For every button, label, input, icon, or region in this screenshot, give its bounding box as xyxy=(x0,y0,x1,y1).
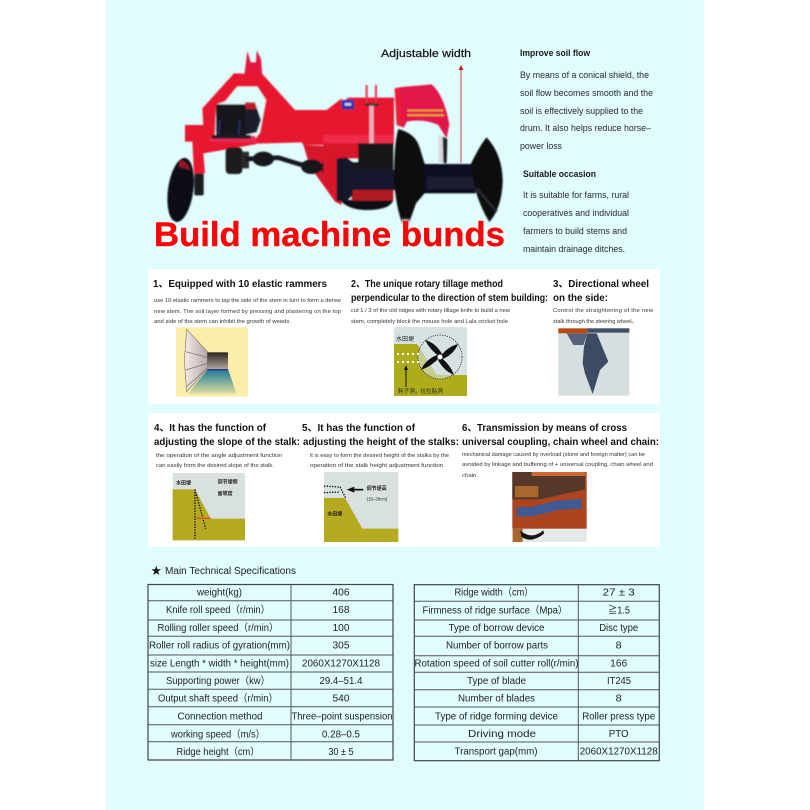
feature 4: 4、It has the function of xyxy=(154,423,267,434)
feature 5: adjusting the height of the stalks: xyxy=(303,437,459,448)
table: specifications right: Roller press type xyxy=(582,711,656,722)
table: specifications left: Connection method xyxy=(178,711,262,722)
text block: suitable occasion: Suitable occasion xyxy=(523,169,596,179)
table: specifications right xyxy=(414,585,659,761)
table: specifications right: 2060X1270X1128 xyxy=(580,747,658,758)
text block: improve soil flow: power loss xyxy=(520,141,563,151)
table: specifications left: Ridge height（cm） xyxy=(176,746,260,758)
table: specifications right: 8 xyxy=(616,641,622,652)
table: specifications right: Rotation speed of soil cutter roll(r/min) xyxy=(414,658,578,669)
scraper blade xyxy=(438,135,447,163)
feature 6: chain. xyxy=(462,473,478,479)
feature 1: use 10 elastic rammers to tap the side of the stem in turn to form a dense xyxy=(154,298,341,304)
heading: main technical specifications: Main Technical Specifications xyxy=(165,566,296,577)
table: specifications left: 30 ± 5 xyxy=(328,747,354,758)
top link xyxy=(365,85,379,163)
table: specifications right: Driving mode xyxy=(468,729,536,740)
text block: improve soil flow: Improve soil flow xyxy=(520,48,590,58)
text block: improve soil flow: drum. It also helps reduce horse– xyxy=(520,123,651,133)
table: specifications left: 305 xyxy=(332,641,350,652)
table: specifications left: Rolling roller speed（r/min） xyxy=(158,622,278,634)
feature 5 xyxy=(302,423,459,542)
feature 1: new stem. The soil layer formed by pressing and plastering on the top xyxy=(154,309,341,315)
text block: suitable occasion: maintain drainage ditches. xyxy=(523,244,625,254)
text block: improve soil flow: By means of a conical shield, the xyxy=(520,70,649,80)
table: specifications left: 540 xyxy=(332,694,350,705)
icon: height diagram xyxy=(324,472,398,542)
title: Build machine bunds: Build machine bunds xyxy=(154,216,505,254)
machine: rear section xyxy=(323,84,503,232)
hitch tower xyxy=(244,50,262,76)
table: specifications left: 406 xyxy=(332,588,350,598)
drum xyxy=(424,164,476,193)
table: specifications left: Output shaft speed（r/min） xyxy=(158,693,278,705)
table: specifications left: Knife roll speed（r/min） xyxy=(166,604,270,616)
table: specifications left: 100 xyxy=(332,623,350,634)
text block: improve soil flow xyxy=(520,48,653,151)
feature 2: perpendicular to the direction of stem building: xyxy=(351,293,548,304)
feature 4: adjusting the slope of the stalk: xyxy=(154,437,300,448)
feature 4: can easily form the desired slope of the stalk. xyxy=(156,463,274,469)
table: specifications right: Transport gap(mm) xyxy=(454,747,538,758)
roller wheel xyxy=(226,147,242,174)
disc stem xyxy=(194,173,204,195)
icon: rotary tillage diagram: 耗子洞，拉拉贴洞 xyxy=(398,387,443,395)
icon: slope diagram: 面坡度 xyxy=(218,490,233,497)
heading: main technical specifications: ★ xyxy=(151,565,162,577)
feature 2: stem, completely block the mouse hole and Lala cricket hole xyxy=(351,319,508,325)
arrow: adjustable width xyxy=(458,65,464,163)
feature 4 xyxy=(154,423,300,540)
table: specifications left: 0.28–0.5 xyxy=(322,729,360,740)
icon: slope diagram: 水田埂 xyxy=(176,479,191,486)
panel: features row 2 xyxy=(148,413,660,547)
feature 3: 3、Directional wheel xyxy=(553,279,649,290)
conical shield xyxy=(395,84,449,138)
feature 4: the operation of the angle adjustment function xyxy=(156,453,282,459)
table: specifications left xyxy=(148,584,393,760)
feature 6: universal coupling, chain wheel and chain: xyxy=(462,437,659,448)
table: specifications left: 2060X1270X1128 xyxy=(302,658,380,669)
right disc cone xyxy=(471,137,503,222)
table: specifications right: Number of borrow parts xyxy=(446,641,548,652)
feature 5: 5、It has the function of xyxy=(302,423,416,434)
left disc xyxy=(164,156,198,224)
feature 3: on the side: xyxy=(553,293,608,304)
icon: slope diagram: 调节埂侧 xyxy=(218,478,238,485)
machine illustration xyxy=(164,50,503,232)
table: specifications right: ≧1.5 xyxy=(608,603,630,616)
feature 1 xyxy=(153,279,341,397)
table: specifications left: 29.4–51.4 xyxy=(320,676,363,687)
icon: rammer diagram xyxy=(176,327,248,397)
table: specifications right: 27 ± 3 xyxy=(603,588,635,599)
logo plate xyxy=(342,100,354,109)
feature 3 xyxy=(553,279,654,396)
table: specifications left: Three–point suspension xyxy=(292,711,392,722)
table: specifications right: IT245 xyxy=(607,676,631,687)
table: specifications right: Ridge width（cm） xyxy=(454,587,534,599)
table: specifications left: Supporting power（kw） xyxy=(166,675,270,687)
feature 3: Control the straightening of the new xyxy=(553,308,654,314)
gearbox xyxy=(216,104,246,137)
label: Adjustable width: Adjustable width xyxy=(381,48,471,60)
feature 5: operation of the stalk height adjustment function. xyxy=(310,463,445,469)
frame opening xyxy=(215,87,266,139)
icon: slope diagram xyxy=(173,473,245,540)
table: specifications right: Type of blade xyxy=(467,676,526,687)
icon: rotary tillage diagram xyxy=(394,327,467,396)
machine: front section xyxy=(164,50,342,224)
feature 5: it is easy to form the desired height of the stalks by the xyxy=(310,453,449,459)
table: specifications right: Type of borrow device xyxy=(448,623,545,634)
title: Build machine bunds: Build machine bunds xyxy=(154,216,505,254)
feature 6: mechanical damage caused by overload (stone and foreign matter) can be xyxy=(462,452,645,458)
lower gearbox xyxy=(340,200,393,210)
lower red plate xyxy=(303,145,342,205)
red main frame xyxy=(185,73,342,173)
red deck xyxy=(323,98,394,143)
feature 6: 6、Transmission by means of cross xyxy=(462,423,627,434)
text block: suitable occasion: farmers to build stems and xyxy=(523,226,627,236)
icon: directional wheel photo xyxy=(558,328,629,396)
table: specifications right: Firmness of ridge surface（Mpa） xyxy=(422,604,568,616)
feature 6 xyxy=(462,423,659,542)
feature 6: avoided by linkage and buffering of + universal coupling, chain wheel and xyxy=(462,462,653,468)
gearbox base xyxy=(210,136,257,142)
feature 1: 1、Equipped with 10 elastic rammers xyxy=(153,279,327,290)
feature 3: stalk through the steering wheel。 xyxy=(553,319,637,325)
text block: suitable occasion: cooperatives and individual xyxy=(523,208,629,218)
table: specifications right: Type of ridge forming device xyxy=(435,711,558,722)
table: specifications left: Roller roll radius of gyration(mm) xyxy=(149,641,290,652)
text block: suitable occasion xyxy=(523,169,629,254)
icon: height diagram: 调节埂高 xyxy=(367,485,387,492)
text block: improve soil flow: soil is effectively supplied to the xyxy=(520,106,643,116)
text block: suitable occasion: It is suitable for farms, rural xyxy=(523,190,629,200)
feature 2: 2、The unique rotary tillage method xyxy=(351,279,503,290)
page background panel xyxy=(106,0,704,810)
table: specifications right: Disc type xyxy=(599,623,639,634)
feature 2 xyxy=(351,279,548,396)
drive shaft xyxy=(245,152,333,174)
icon: height diagram: (15–30cm) xyxy=(367,496,388,501)
panel: features row 1 xyxy=(148,269,660,404)
table: specifications left: 168 xyxy=(332,605,350,616)
table: specifications left: size Length * width * height(mm) xyxy=(150,658,289,669)
table: specifications right: PTO xyxy=(609,729,629,740)
text block: improve soil flow: soil flow becomes smooth and the xyxy=(520,88,653,98)
table: specifications left: working speed（m/s） xyxy=(170,728,265,740)
mechanism behind xyxy=(358,143,393,163)
icon: rotary tillage diagram: 水田埂 xyxy=(396,335,414,343)
table: specifications right: 8 xyxy=(616,694,622,705)
feature 2: cut 1 / 3 of the old ridges with rotary tillage knife to build a new xyxy=(351,308,511,314)
icon: coupling photo xyxy=(512,472,587,542)
icon: height diagram: 水田埂 xyxy=(327,511,342,518)
table: specifications right: Number of blades xyxy=(458,694,535,705)
table: specifications left: weight(kg) xyxy=(196,588,242,598)
central disc and cone xyxy=(394,129,427,232)
table: specifications right: 166 xyxy=(610,658,628,669)
feature 1: and side of the stem can inhibit the growth of weeds. xyxy=(154,319,291,325)
